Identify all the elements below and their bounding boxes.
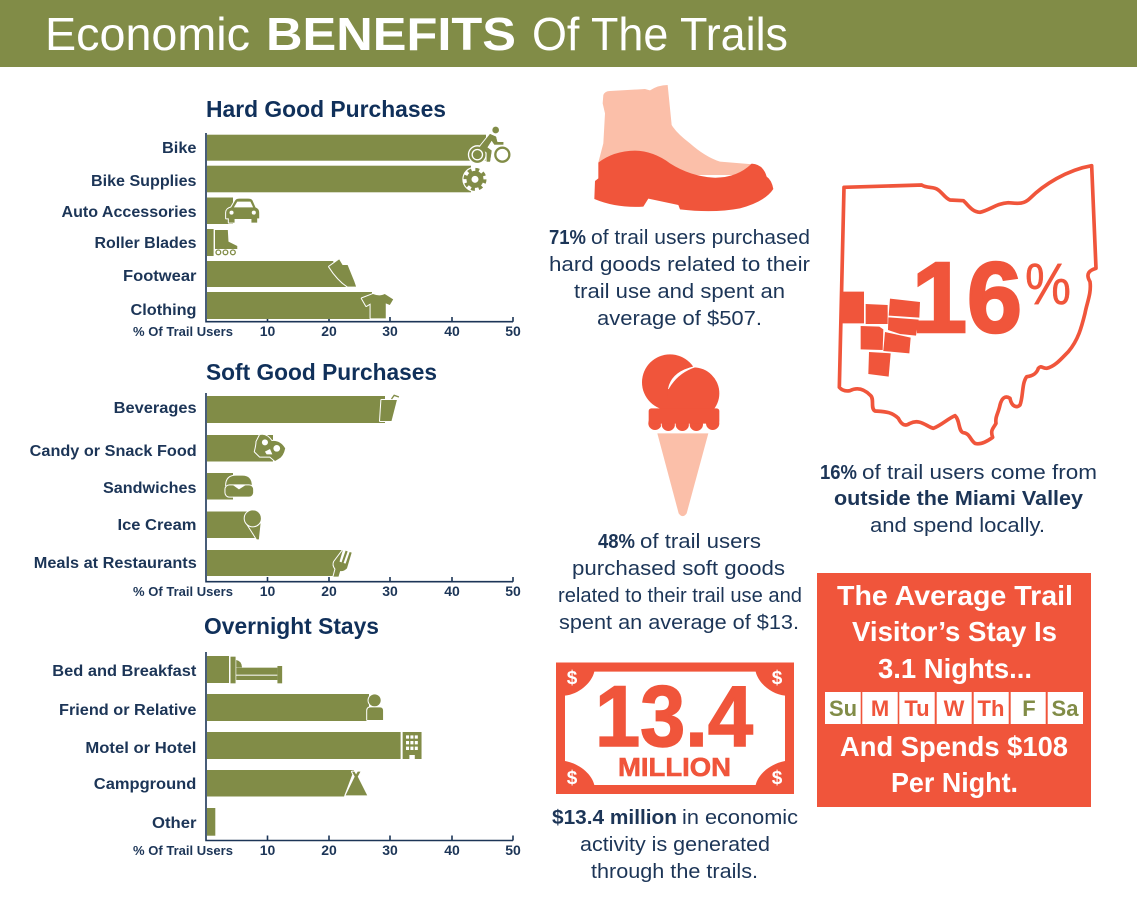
panel: average stay callout: And Spends $108 <box>840 731 1068 762</box>
icon: dollar bill 13.4 million: $ <box>567 668 578 689</box>
text: hard goods statistic: of trail users purchased <box>591 227 810 249</box>
axis <box>206 133 513 322</box>
axis labels: 50 <box>505 842 521 858</box>
axis labels: 10 <box>260 323 275 339</box>
text: economic activity statistic: through the trails. <box>591 861 758 883</box>
icon: boot <box>594 85 773 211</box>
row: roller blades: Roller Blades <box>94 235 196 252</box>
week calendar: Sa <box>1052 696 1079 721</box>
row: bike: Bike <box>162 140 197 157</box>
text: hard goods statistic: trail use and spent an <box>574 281 785 303</box>
row: candy or snack food <box>30 435 285 462</box>
week calendar: Su <box>829 696 857 721</box>
row: campground: Campground <box>94 776 196 793</box>
row: bed and breakfast <box>52 656 282 683</box>
icon: dollar bill 13.4 million: 13.4 <box>595 669 753 765</box>
axis labels: 40 <box>444 583 460 599</box>
title banner <box>0 0 1137 67</box>
map: ohio outline with counties and 16%: 16 <box>912 242 1022 354</box>
axis labels: 50 <box>505 583 521 599</box>
axis labels: 20 <box>321 842 337 858</box>
row: other <box>152 808 215 836</box>
icon: dollar bill 13.4 million: $ <box>567 768 578 789</box>
week calendar: W <box>944 696 965 721</box>
row: roller blades <box>94 229 237 256</box>
text: outside miami valley statistic: and spend locally. <box>870 515 1045 537</box>
axis labels <box>133 583 521 599</box>
heading: hard good purchases: Hard Good Purchases <box>206 96 446 122</box>
text: economic activity statistic: in economic <box>682 807 798 829</box>
panel: average stay callout: The Average Trail <box>837 580 1073 611</box>
icon: dollar bill 13.4 million: MILLION <box>618 752 731 782</box>
row: bike supplies: Bike Supplies <box>91 173 196 190</box>
row: motel or hotel: Motel or Hotel <box>85 740 196 757</box>
row: friend or relative: Friend or Relative <box>59 702 197 719</box>
map: ohio outline with counties and 16% <box>839 166 1096 444</box>
text: soft goods statistic: spent an average of $13. <box>559 612 799 634</box>
axis labels: 10 <box>260 842 275 858</box>
heading: soft good purchases: Soft Good Purchases <box>206 359 437 385</box>
axis <box>206 652 513 840</box>
axis labels: 40 <box>444 323 460 339</box>
panel: average stay callout: Per Night. <box>891 767 1018 798</box>
text: soft goods statistic <box>558 531 802 634</box>
axis labels: 20 <box>321 583 337 599</box>
axis labels: % Of Trail Users <box>133 585 233 599</box>
icon: dollar bill 13.4 million <box>556 662 794 794</box>
axis labels: 10 <box>260 583 275 599</box>
title banner: BENEFITS <box>266 8 516 60</box>
week calendar: F <box>1022 696 1036 721</box>
text: economic activity statistic: activity is generated <box>580 834 770 856</box>
icon: dollar bill 13.4 million: $ <box>772 768 783 789</box>
axis labels: 30 <box>382 323 398 339</box>
week calendar: M <box>871 696 889 721</box>
text: outside miami valley statistic: of trail users come from <box>862 462 1097 484</box>
text: soft goods statistic: 48% <box>598 531 635 553</box>
row: friend or relative <box>59 694 383 721</box>
row: ice cream: Ice Cream <box>118 517 196 534</box>
title banner: Economic <box>45 8 250 60</box>
row: ice cream <box>118 510 261 539</box>
row: auto accessories: Auto Accessories <box>62 204 196 221</box>
row: meals at restaurants <box>34 550 352 577</box>
text: economic activity statistic: $13.4 million <box>552 807 677 829</box>
row: footwear <box>123 259 356 287</box>
axis labels <box>133 842 521 858</box>
panel: average stay callout: 3.1 Nights... <box>878 653 1032 684</box>
axis labels: % Of Trail Users <box>133 325 233 339</box>
row: meals at restaurants: Meals at Restaurants <box>34 555 197 572</box>
axis labels: 30 <box>382 583 398 599</box>
row: bike supplies <box>91 166 488 192</box>
row: motel or hotel <box>85 732 422 759</box>
text: soft goods statistic: of trail users <box>640 531 761 553</box>
map: ohio outline with counties and 16%: % <box>1025 252 1071 317</box>
row: bike <box>162 127 509 162</box>
axis labels <box>133 323 521 339</box>
row: clothing <box>130 292 393 319</box>
text: outside miami valley statistic: outside the Miami Valley <box>834 488 1084 510</box>
row: sandwiches <box>103 473 253 500</box>
row: beverages: Beverages <box>114 400 197 417</box>
text: outside miami valley statistic: 16% <box>820 462 857 484</box>
axis labels: 50 <box>505 323 521 339</box>
row: auto accessories <box>62 198 259 224</box>
axis labels: % Of Trail Users <box>133 844 233 858</box>
axis labels: 30 <box>382 842 398 858</box>
panel: hard good purchases chart <box>62 96 521 339</box>
week calendar: Tu <box>904 696 930 721</box>
text: outside miami valley statistic <box>820 462 1097 537</box>
row: footwear: Footwear <box>123 268 196 285</box>
text: soft goods statistic: related to their trail use and <box>558 585 802 607</box>
panel: soft good purchases chart <box>30 359 521 599</box>
title banner: Of The Trails <box>532 8 788 60</box>
heading: overnight stays: Overnight Stays <box>204 613 379 639</box>
icon: dollar bill 13.4 million: $ <box>772 668 783 689</box>
text: hard goods statistic: 71% <box>549 227 586 249</box>
text: hard goods statistic: hard goods related to their <box>549 254 810 276</box>
row: bed and breakfast: Bed and Breakfast <box>52 663 196 680</box>
panel: average stay callout: Visitor’s Stay Is <box>852 616 1057 647</box>
text: hard goods statistic: average of $507. <box>597 308 762 330</box>
text: economic activity statistic <box>552 807 798 883</box>
row: campground <box>94 770 367 796</box>
axis <box>206 393 513 582</box>
week calendar: Th <box>978 696 1004 721</box>
axis labels: 20 <box>321 323 337 339</box>
panel: average stay callout <box>817 573 1091 807</box>
row: sandwiches: Sandwiches <box>103 480 196 497</box>
row: beverages <box>114 395 399 423</box>
row: candy or snack food: Candy or Snack Food <box>30 443 197 460</box>
text: hard goods statistic <box>549 227 810 330</box>
row: clothing: Clothing <box>130 302 196 319</box>
week calendar <box>825 692 1083 724</box>
icon: ice cream cone <box>642 354 719 516</box>
text: soft goods statistic: purchased soft goods <box>572 558 785 580</box>
panel: overnight stays chart <box>52 613 521 858</box>
row: other: Other <box>152 815 196 832</box>
axis labels: 40 <box>444 842 460 858</box>
